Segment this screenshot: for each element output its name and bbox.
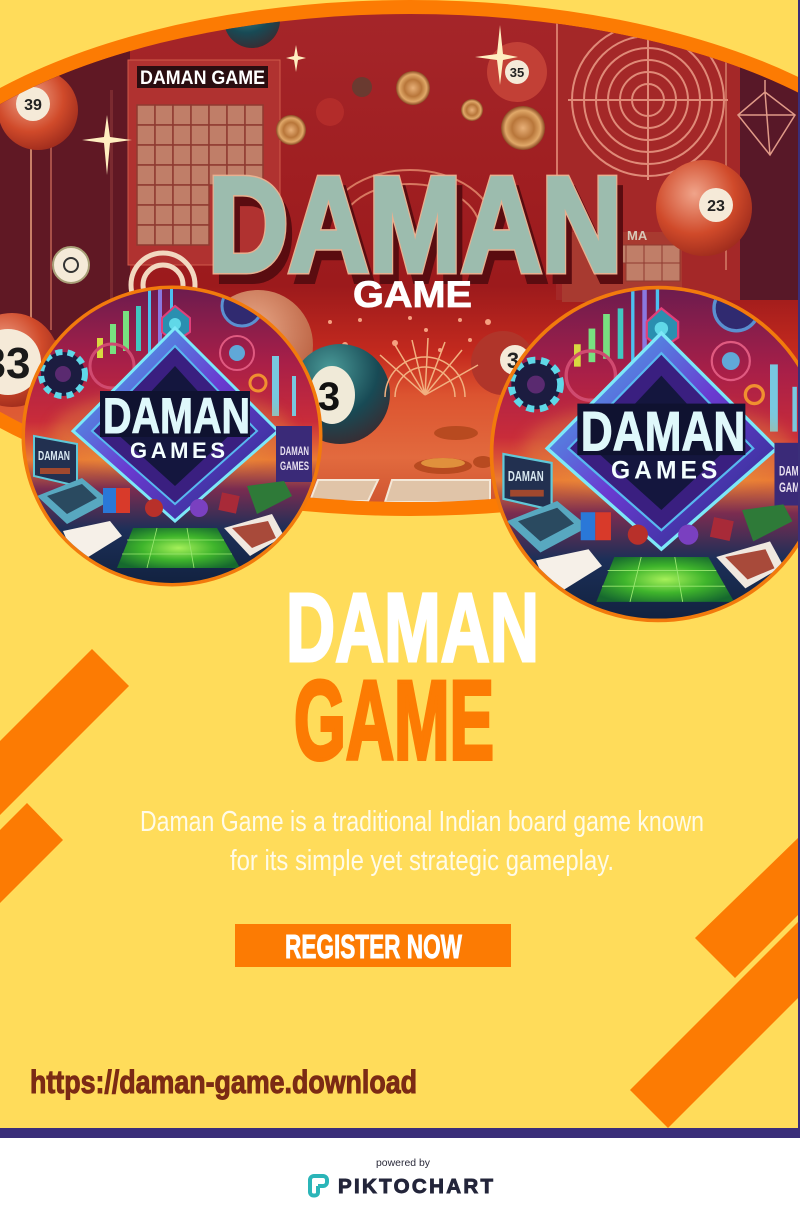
lower fan	[380, 338, 478, 397]
ball 39: 39	[24, 97, 42, 114]
confetti sparks	[328, 316, 492, 352]
dark teal ball: 3	[318, 375, 340, 419]
icon: piktochart logo	[310, 1176, 327, 1196]
ball 35: 35	[510, 65, 524, 80]
target rings	[568, 20, 728, 180]
copper ball	[230, 290, 313, 361]
heading: GAME: GAME	[294, 658, 494, 783]
dark top ball	[226, 22, 280, 48]
big glitter DAMAN title: DAMAN	[208, 149, 622, 300]
circle badge: Daman Games right: DAMAN	[581, 400, 745, 463]
big glitter DAMAN title: DAMAN	[208, 149, 622, 300]
big glitter DAMAN title: DAMAN	[214, 159, 628, 310]
lower right grid panel: MA	[627, 228, 648, 243]
circle badge: Daman Games left: DAMAN	[280, 444, 309, 458]
sparkles	[82, 25, 518, 175]
piktochart wordmark: PIKTOCHART	[338, 1175, 493, 1198]
ball 33 left	[0, 313, 59, 407]
circle badge: Daman Games left: GAMES	[130, 438, 225, 463]
big glitter DAMAN title	[212, 174, 623, 284]
board panel with header	[128, 60, 280, 265]
circle badge: Daman Games left: DAMAN	[38, 448, 70, 463]
ball 3 right	[471, 331, 535, 395]
gold tokens	[53, 71, 545, 317]
heading: DAMAN: DAMAN	[286, 573, 539, 682]
circle badge: Daman Games right: GAMES	[611, 458, 717, 485]
GAME subtitle: GAME	[353, 274, 472, 315]
powered by label: powered by	[376, 1158, 430, 1169]
footer area	[0, 1138, 800, 1218]
diamond outline	[738, 80, 795, 155]
button: register now	[235, 924, 511, 967]
navy footer band	[0, 1128, 800, 1138]
decorative orange slash: left lower	[0, 803, 63, 903]
circle badge: Daman Games left	[25, 286, 319, 583]
ball 3 right: 3	[507, 348, 519, 373]
description text	[140, 806, 704, 877]
fan arcs upper	[346, 169, 483, 219]
coins on table	[414, 426, 493, 474]
board panel with header: DAMAN GAME	[140, 68, 265, 89]
lower right grid panel	[562, 228, 682, 302]
circle badge: Daman Games right: DAMAN	[508, 469, 544, 485]
ball 23	[656, 160, 752, 256]
decorative orange slash: right lower	[630, 922, 798, 1128]
ball 35	[487, 42, 547, 102]
button: register now: REGISTER NOW	[285, 928, 463, 965]
ball 39	[0, 70, 78, 150]
decorative orange slash: right upper	[695, 838, 798, 978]
website url: https://daman-game.download	[30, 1064, 417, 1100]
ball 23: 23	[707, 198, 725, 215]
right edge strip	[798, 0, 800, 1128]
papers on table	[310, 480, 490, 502]
decorative orange slash: left upper	[0, 649, 129, 815]
dark teal ball	[302, 344, 390, 444]
circle badge: Daman Games left: DAMAN	[103, 388, 250, 444]
banner: Daman Game hero image in orange oval	[0, 0, 800, 520]
circle badge: Daman Games left: GAMES	[280, 459, 309, 473]
circle badge: Daman Games right	[493, 286, 800, 619]
description text: for its simple yet strategic gameplay.	[230, 845, 614, 877]
